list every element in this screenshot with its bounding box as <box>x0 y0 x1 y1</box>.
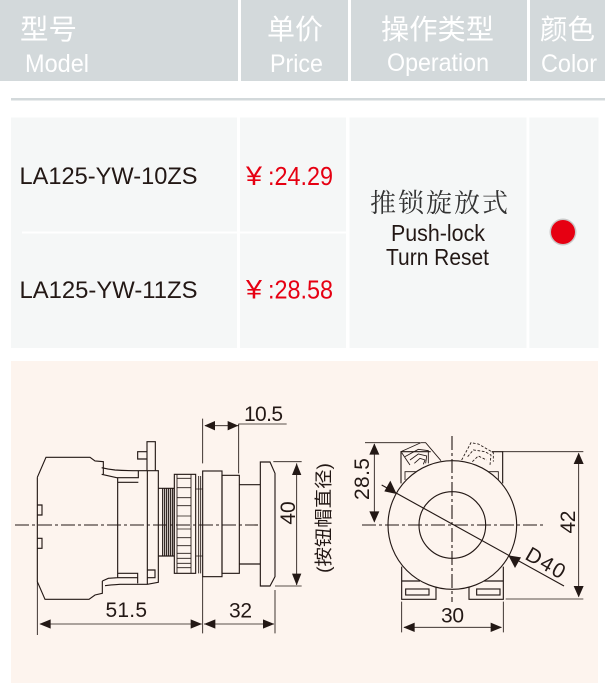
column: model: LA125-YW-11ZS <box>20 277 198 304</box>
dimension 28.5: 28.5 <box>351 458 374 500</box>
column: price <box>240 118 346 348</box>
dimension 51.5 <box>37 577 203 635</box>
dimension 30 <box>402 602 503 632</box>
button front view outline <box>388 443 517 599</box>
column: price: :24.29 <box>268 161 333 191</box>
dimension 10.5: 10.5 <box>244 403 283 426</box>
column: color swatch <box>529 118 598 348</box>
header cell: operation: Operation <box>387 49 489 77</box>
dimension 28.5 <box>351 443 420 523</box>
column: operation: Push-lock <box>391 220 485 246</box>
dimension 40 <box>273 462 302 586</box>
dimension 32: 32 <box>229 600 252 622</box>
side view centre line <box>15 524 258 526</box>
dimension 42 <box>502 452 584 599</box>
column: operation: 推锁旋放式 <box>370 189 508 218</box>
dimension D40: D40 <box>521 543 569 584</box>
column: price: :28.58 <box>268 274 333 304</box>
front view drawing <box>351 436 584 632</box>
side view drawing <box>15 403 334 635</box>
dimension 51.5: 51.5 <box>106 599 147 622</box>
header cell: price: Price <box>270 50 323 78</box>
header cell: price <box>241 0 348 81</box>
button side view outline <box>37 442 275 599</box>
drawing panel background <box>11 361 598 683</box>
column: model: LA125-YW-10ZS <box>20 163 198 190</box>
column: price: ¥ <box>245 161 263 191</box>
header cell: model: Model <box>25 50 89 78</box>
header cell: model <box>0 0 238 81</box>
dimension 30: 30 <box>441 604 464 628</box>
header cell: color: 颜色 <box>540 14 595 45</box>
column: operation <box>350 118 526 348</box>
header cell: color <box>530 0 605 81</box>
dimension 40: 40 <box>277 501 300 525</box>
header cell: operation: 操作类型 <box>381 14 494 45</box>
dimension 32 <box>204 590 275 633</box>
dimension 42: 42 <box>557 510 580 534</box>
separator line <box>11 98 605 100</box>
header row <box>0 0 605 81</box>
label: button cap diameter: (按钮帽直径) <box>314 463 334 573</box>
row divider <box>22 232 346 234</box>
column: operation: Turn Reset <box>386 244 490 270</box>
dimension 10.5 <box>203 403 287 473</box>
dimension D40 <box>382 481 569 586</box>
front view centre lines <box>362 436 545 602</box>
header cell: operation <box>351 0 527 81</box>
header cell: model: 型号 <box>20 14 77 45</box>
data table <box>11 118 598 348</box>
header cell: price: 单价 <box>267 14 323 45</box>
column: price: ¥ <box>245 274 263 304</box>
header cell: color: Color <box>541 50 597 78</box>
column: model <box>11 118 237 348</box>
